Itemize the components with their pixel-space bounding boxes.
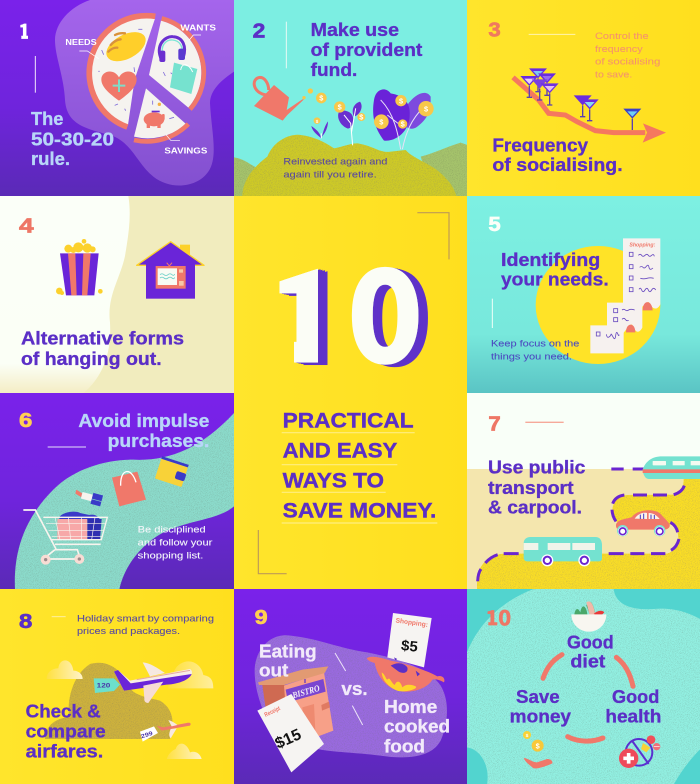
label: wants: WANTS bbox=[180, 22, 217, 32]
icon: salad bowl bbox=[571, 601, 606, 632]
body text: Holiday smart by comparing bbox=[77, 613, 214, 623]
slice: wants bbox=[149, 18, 204, 109]
teal wave bbox=[15, 413, 234, 590]
icon: lipstick bbox=[74, 488, 103, 506]
label: savings bbox=[164, 135, 208, 155]
icon: bus bbox=[524, 537, 602, 566]
icon: shopping list papers bbox=[590, 238, 660, 353]
heading: of provident bbox=[311, 39, 422, 60]
panel: 3 frequency of socialising bbox=[467, 0, 700, 197]
icon: receipt: Receipt bbox=[263, 705, 282, 719]
panel: 1 the 50-30-20 rule bbox=[0, 0, 234, 197]
labels: Good bbox=[567, 631, 614, 652]
heading bbox=[78, 410, 209, 451]
heading bbox=[492, 135, 623, 175]
icon: shopping note: $5 bbox=[400, 638, 418, 656]
grainy mound bbox=[242, 135, 457, 197]
eating out text bbox=[259, 640, 317, 680]
panel: center title bbox=[234, 196, 467, 589]
number 5: 5 bbox=[488, 214, 501, 236]
body text: to save. bbox=[595, 69, 632, 79]
icon: piggy bank bbox=[144, 103, 165, 128]
title text: WAYS TO bbox=[283, 468, 384, 493]
icon: money tree: $ bbox=[379, 117, 383, 126]
grainy cloud bbox=[45, 663, 173, 739]
hills bbox=[234, 143, 467, 197]
icon: money tree: $ bbox=[399, 96, 403, 105]
blob bbox=[255, 635, 447, 757]
panel: 4 alternative forms of hanging out bbox=[0, 196, 234, 393]
vs text: vs. bbox=[341, 678, 368, 699]
confetti marks bbox=[98, 29, 174, 119]
body text: again till you retire. bbox=[283, 169, 377, 179]
heading: fund. bbox=[311, 59, 357, 80]
icon: health pills and cross bbox=[619, 735, 660, 768]
heading: airfares. bbox=[26, 740, 103, 761]
icon: money tree: $ bbox=[424, 104, 428, 113]
number 7: 7 bbox=[488, 414, 501, 436]
icon: small plane and price tag: 299 bbox=[140, 731, 154, 740]
body text bbox=[491, 338, 579, 361]
labels: diet bbox=[570, 651, 605, 672]
icon: hand and coins bbox=[523, 731, 552, 768]
home cooked food text: food bbox=[384, 735, 425, 756]
icon: money tree bbox=[316, 89, 434, 149]
heading bbox=[501, 249, 609, 289]
icon: money tree: $ bbox=[316, 119, 319, 124]
body text: of socialising bbox=[595, 57, 660, 67]
icon: hand and coins: $ bbox=[536, 741, 540, 750]
body text: Be disciplined bbox=[138, 524, 206, 534]
icon: shopping cart bbox=[23, 510, 107, 565]
heading: Frequency bbox=[492, 135, 589, 156]
icon: coins and seedling bbox=[302, 88, 328, 138]
heading: Avoid impulse bbox=[78, 410, 209, 431]
body text: Control the bbox=[595, 31, 649, 41]
body text: Reinvested again and bbox=[283, 156, 387, 166]
icon: pale clouds bbox=[47, 660, 213, 759]
labels: Save bbox=[516, 686, 560, 707]
eating out text: out bbox=[259, 659, 288, 680]
icon: money tree: $ bbox=[319, 94, 323, 103]
big number 10: 0 bbox=[348, 216, 422, 398]
icon: heart with plus bbox=[101, 71, 137, 101]
arrow: falling trend bbox=[513, 77, 666, 143]
icon: cocktail glasses bbox=[520, 68, 641, 130]
icon: house with tv bbox=[137, 242, 204, 299]
body text: things you need. bbox=[491, 351, 572, 361]
number 4: 4 bbox=[19, 216, 34, 238]
icon: money tree: $ bbox=[401, 120, 405, 129]
heading: & carpool. bbox=[488, 497, 582, 518]
heading: of socialising. bbox=[492, 154, 623, 175]
panel: 6 avoid impulse purchases bbox=[0, 393, 234, 590]
number 9: 9 bbox=[255, 607, 268, 629]
heading: Use public bbox=[488, 457, 585, 478]
title text: SAVE MONEY. bbox=[283, 498, 436, 523]
body text: frequency bbox=[595, 44, 643, 54]
panel: 10 good diet cycle bbox=[467, 589, 700, 784]
heading bbox=[311, 19, 422, 80]
yellow circle bbox=[536, 246, 660, 364]
label: savings: SAVINGS bbox=[164, 145, 208, 155]
number 2: 2 bbox=[253, 21, 265, 43]
body text: prices and packages. bbox=[77, 626, 180, 636]
heading: your needs. bbox=[501, 268, 609, 289]
panel: 9 eating out vs home cooked food bbox=[234, 589, 467, 784]
body text bbox=[77, 613, 214, 636]
icon: wok with flames bbox=[367, 657, 444, 692]
heading: compare bbox=[26, 720, 106, 741]
home cooked food text: cooked bbox=[384, 715, 450, 736]
icon: shopping note: Shopping: bbox=[395, 617, 428, 629]
eating out text: Eating bbox=[259, 640, 317, 661]
heading: Make use bbox=[311, 19, 399, 40]
icon: big plane and price tag bbox=[94, 662, 192, 703]
body text bbox=[138, 524, 212, 561]
number 10: 10 bbox=[486, 602, 511, 631]
icon: bread bbox=[102, 26, 150, 67]
slice: needs bbox=[89, 16, 155, 127]
icon: watering can bbox=[254, 77, 304, 121]
heading bbox=[31, 108, 114, 169]
icon: wallet bbox=[155, 456, 189, 487]
icon: shopping list papers: Shopping: bbox=[629, 242, 655, 248]
heading: Alternative forms bbox=[21, 327, 184, 348]
icon: car bbox=[616, 510, 670, 536]
heading: The bbox=[31, 108, 63, 129]
body text: and follow your bbox=[138, 537, 212, 547]
heading: rule. bbox=[31, 148, 70, 169]
heading: purchases. bbox=[108, 430, 209, 451]
panel: 2 provident fund bbox=[234, 0, 467, 197]
beige background shape bbox=[83, 196, 234, 393]
cycle arrows bbox=[543, 655, 633, 741]
heading: of hanging out. bbox=[21, 348, 162, 369]
number 1: 1 bbox=[19, 15, 30, 44]
icon: headphones bbox=[159, 37, 185, 62]
icon: train bbox=[643, 456, 700, 479]
label: wants bbox=[180, 22, 217, 40]
icon: shopping bag bbox=[170, 63, 197, 94]
big number 10 bbox=[279, 266, 428, 368]
dashed route bbox=[478, 469, 684, 581]
labels bbox=[510, 631, 661, 726]
labels: Good bbox=[612, 686, 659, 707]
panel: 8 check and compare airfares bbox=[0, 589, 234, 784]
number 6: 6 bbox=[19, 410, 32, 432]
panel: 5 identifying your needs bbox=[467, 196, 700, 393]
label: needs: NEEDS bbox=[65, 37, 97, 47]
icon: red shopping bag bbox=[112, 472, 146, 506]
textured blob bbox=[467, 589, 700, 784]
panel: 7 public transport and carpool bbox=[467, 393, 700, 590]
heading: Identifying bbox=[501, 249, 600, 270]
heading bbox=[26, 700, 106, 761]
yellow road ground bbox=[477, 479, 700, 590]
label: needs bbox=[65, 37, 99, 59]
body text: shopping list. bbox=[138, 551, 203, 561]
heading: 50-30-20 bbox=[31, 128, 114, 149]
body text bbox=[595, 31, 660, 79]
icon: money tree: $ bbox=[359, 112, 363, 121]
icon: shopping note bbox=[387, 613, 432, 667]
big number 10: 1 bbox=[270, 216, 344, 398]
icon: receipt bbox=[257, 694, 324, 772]
title text: AND EASY bbox=[283, 438, 398, 463]
body text: Keep focus on the bbox=[491, 338, 579, 348]
body text bbox=[283, 156, 387, 179]
title text bbox=[283, 408, 436, 523]
labels: money bbox=[510, 705, 572, 726]
slice: savings bbox=[134, 88, 188, 141]
icon: hand and coins: $ bbox=[526, 733, 529, 739]
heading: transport bbox=[488, 477, 574, 498]
heading bbox=[488, 457, 585, 518]
number 8: 8 bbox=[19, 611, 32, 633]
icon: big plane and price tag: 120 bbox=[97, 682, 111, 689]
pie chart bbox=[89, 16, 204, 141]
blob behind pie bbox=[55, 0, 234, 186]
home cooked food text bbox=[384, 696, 450, 756]
icon: bistro building: BISTRO bbox=[290, 683, 321, 700]
title text: PRACTICAL bbox=[283, 408, 414, 433]
icon: small plane and price tag bbox=[140, 720, 191, 742]
icon: money tree: $ bbox=[338, 103, 342, 112]
labels: health bbox=[605, 705, 661, 726]
icon: popcorn box bbox=[56, 239, 103, 295]
icon: receipt: $15 bbox=[273, 726, 304, 753]
number 3: 3 bbox=[488, 20, 501, 42]
icon: bistro building bbox=[258, 666, 333, 747]
heading: Check & bbox=[26, 700, 101, 721]
home cooked food text: Home bbox=[384, 696, 437, 717]
heading bbox=[21, 327, 184, 369]
icon: middle plant bbox=[334, 101, 365, 145]
